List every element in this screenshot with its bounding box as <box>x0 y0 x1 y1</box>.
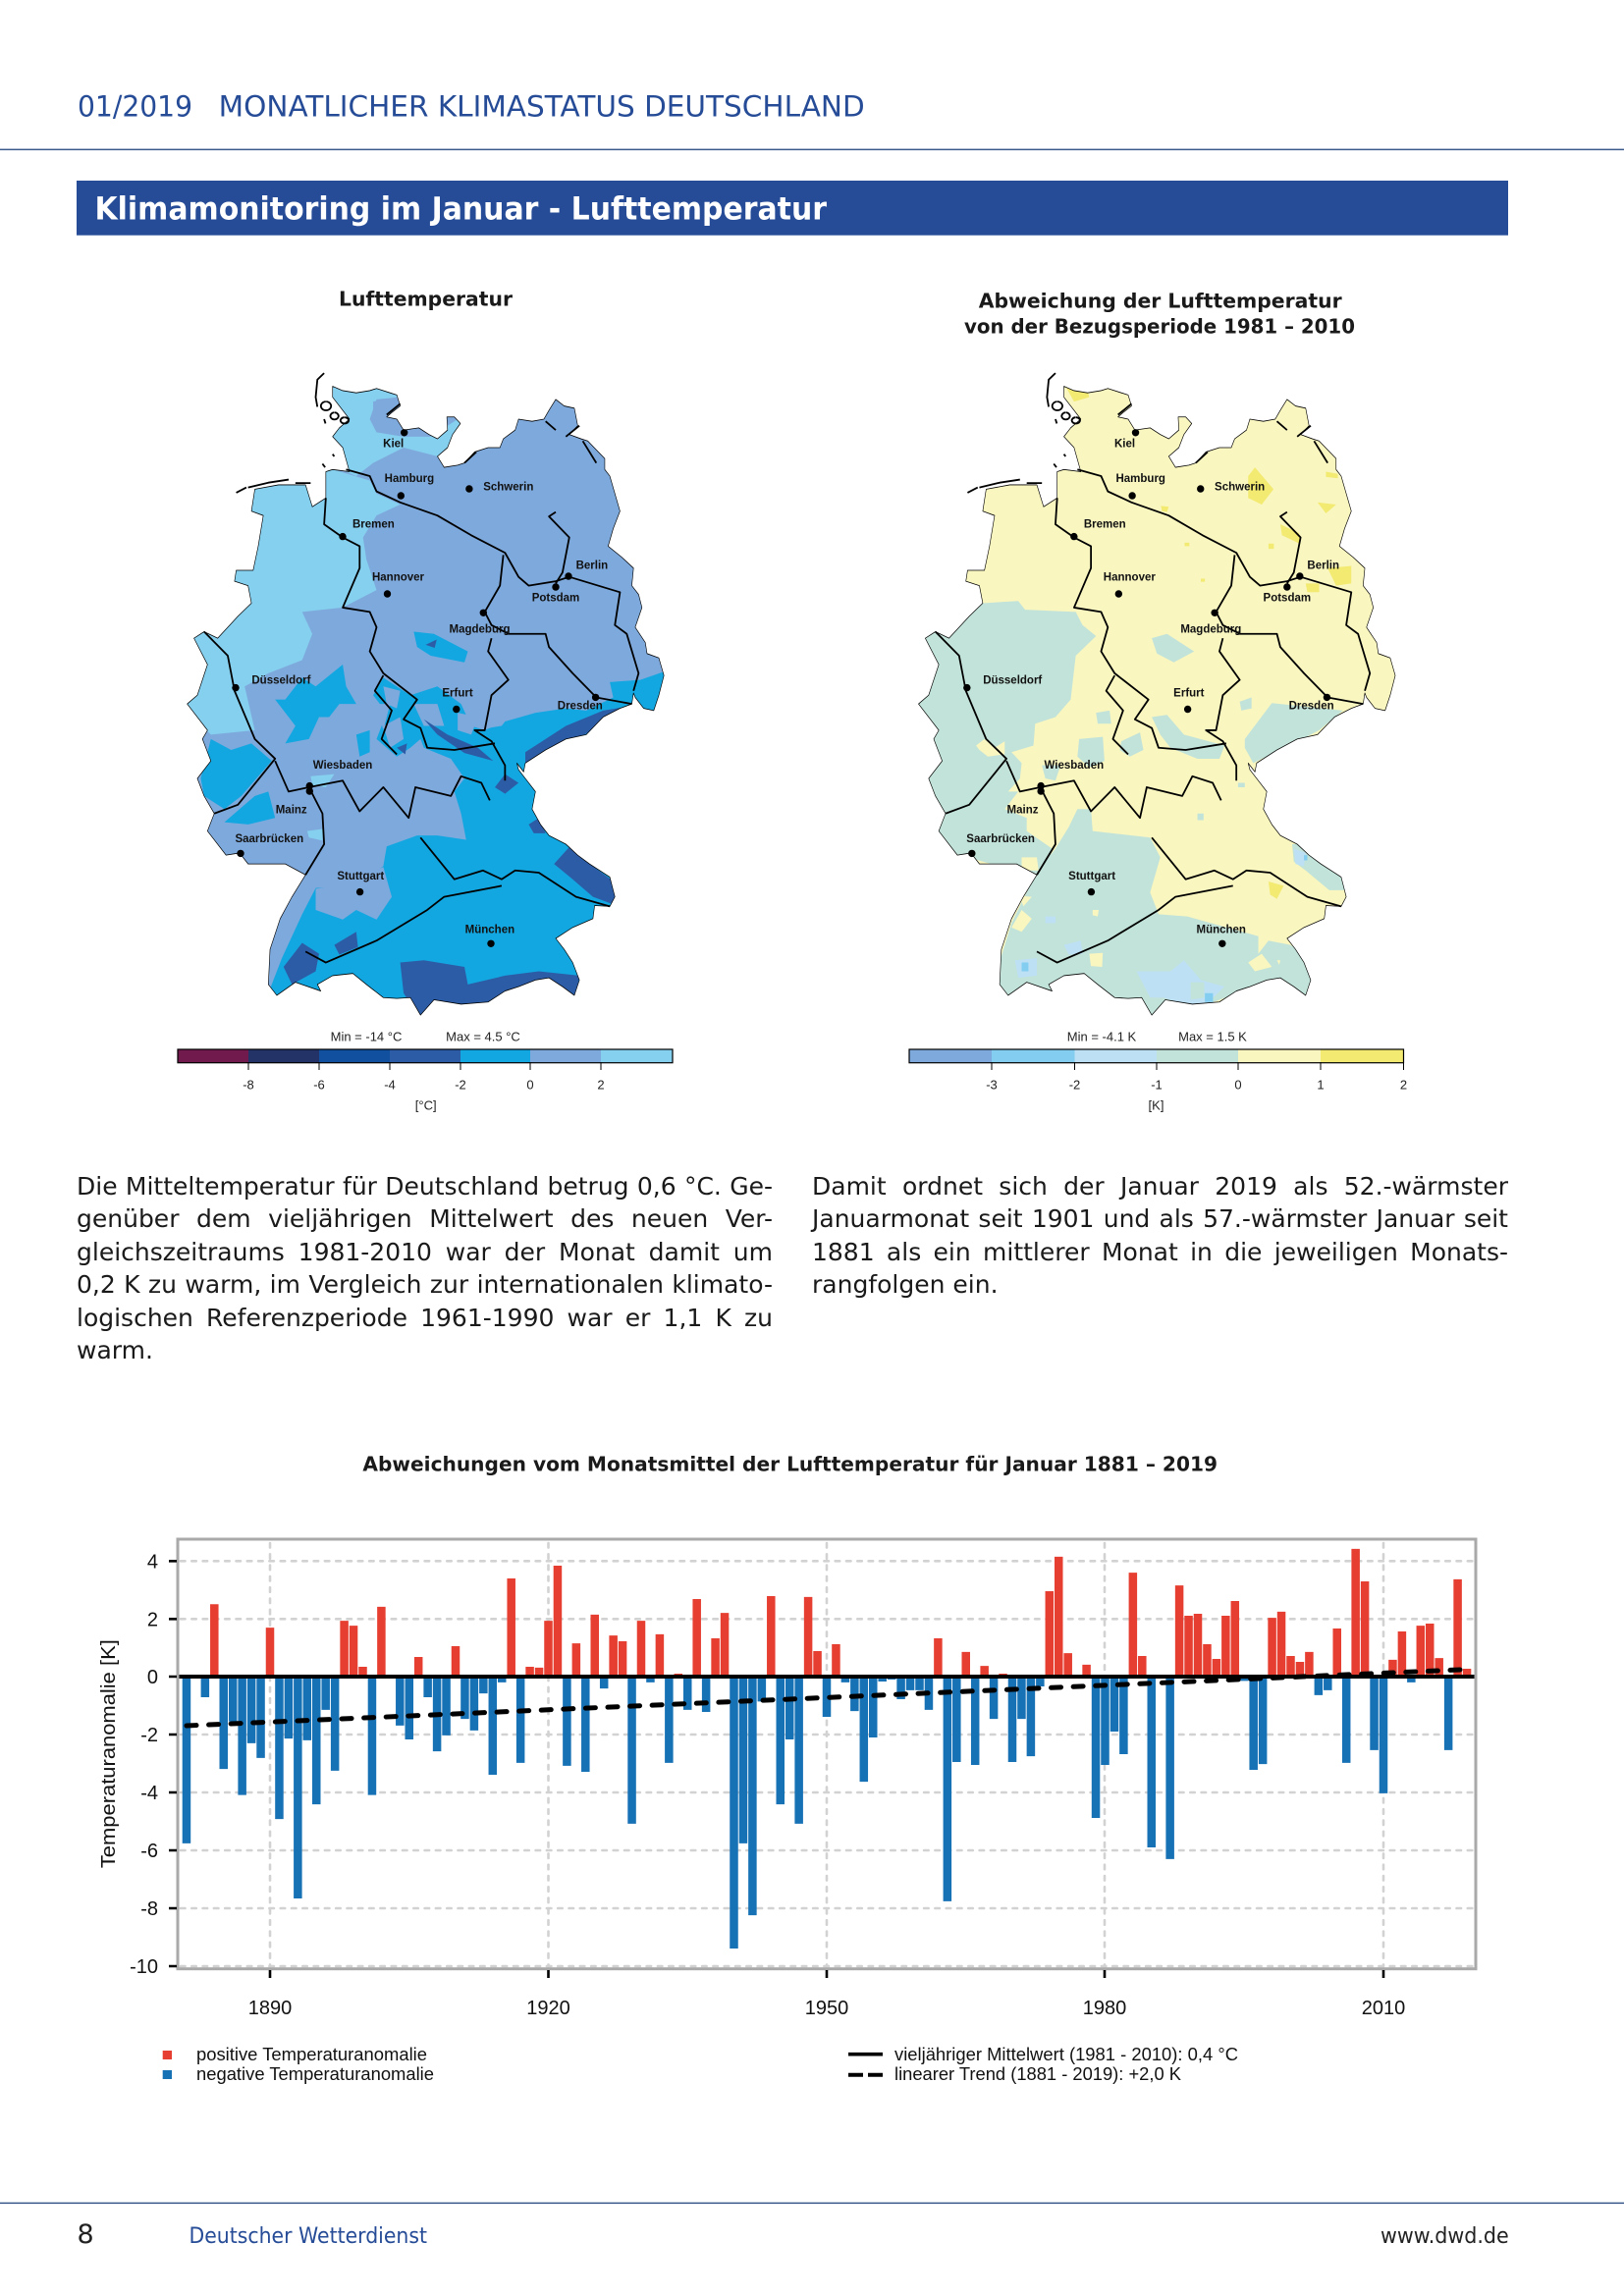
city markers and names: Magdeburg <box>1180 623 1241 635</box>
temperature colour legend: Max = 4.5 °C <box>446 1029 520 1044</box>
bar chart: January temperature anomalies 1881-2019 <box>98 1539 1476 2019</box>
temperature colour legend: 0 <box>526 1078 534 1092</box>
section banner: Klimamonitoring im Januar - Lufttemperatur <box>94 189 827 227</box>
city markers and names: Düsseldorf <box>983 675 1042 687</box>
city markers and names: Kiel <box>383 438 404 450</box>
footer: Deutscher Wetterdienst <box>189 2223 427 2249</box>
text block: left column: 0,2 K zu warm, im Vergleich zur internationalen klimato- <box>77 1270 773 1299</box>
map title: deviation from reference period: von der Bezugsperiode 1981 – 2010 <box>964 314 1355 338</box>
map title: deviation from reference period <box>964 289 1355 338</box>
x axis labels: 1950 <box>805 1998 848 2019</box>
chart title: Abweichungen vom Monatsmittel der Lufttemperatur für Januar 1881 – 2019 <box>362 1452 1218 1475</box>
positive anomaly bars <box>210 1549 1471 1677</box>
y axis labels <box>130 1551 158 1978</box>
zero reference line <box>178 1675 1476 1679</box>
city markers and names: München <box>465 925 514 936</box>
chart legend: lines: linearer Trend (1881 - 2019): +2,0 K <box>894 2063 1182 2084</box>
city markers and names: Mainz <box>1007 805 1039 817</box>
linear trend line <box>187 1670 1466 1726</box>
text block: left column: logischen Referenzperiode 1961-1990 war er 1,1 K zu <box>77 1304 773 1332</box>
city markers and names: Wiesbaden <box>1045 760 1104 772</box>
map title: deviation from reference period: Abweichung der Lufttemperatur <box>979 289 1343 312</box>
city markers and names: Erfurt <box>442 687 473 699</box>
map: temperature anomaly regions of Germany <box>918 373 1396 1015</box>
y axis labels: 0 <box>147 1667 158 1688</box>
chart legend: anomalies: negative Temperaturanomalie <box>196 2063 434 2084</box>
city markers and names: Saarbrücken <box>966 833 1035 845</box>
x axis labels <box>248 1998 1405 2019</box>
panel: air temperature map <box>167 288 697 1113</box>
text block: right column: Damit ordnet sich der Januar 2019 als 52.-wärmster <box>812 1172 1508 1201</box>
temperature colour legend: -4 <box>384 1078 396 1092</box>
city markers and names <box>232 429 608 947</box>
city markers and names <box>963 429 1339 947</box>
temperature colour legend: Min = -14 °C <box>331 1029 402 1044</box>
anomaly colour legend: 1 <box>1317 1078 1325 1092</box>
anomaly colour legend: [K] <box>1149 1097 1164 1113</box>
temperature colour legend: -6 <box>313 1078 325 1092</box>
city markers and names: Dresden <box>1289 701 1334 713</box>
panel: deviation map <box>903 289 1434 1113</box>
city markers and names: Erfurt <box>1173 687 1205 699</box>
temperature colour legend: -2 <box>455 1078 466 1092</box>
chart legend: anomalies: positive Temperaturanomalie <box>196 2044 427 2064</box>
y axis labels: 2 <box>147 1610 158 1631</box>
temperature colour legend <box>178 1029 673 1113</box>
header title: 01/2019 <box>78 89 192 123</box>
x axis labels: 1980 <box>1083 1998 1126 2019</box>
header title: MONATLICHER KLIMASTATUS DEUTSCHLAND <box>219 89 865 123</box>
city markers and names: Schwerin <box>1215 482 1265 494</box>
city markers and names: Hamburg <box>385 473 434 485</box>
city markers and names: Berlin <box>1307 561 1339 572</box>
text block: left column <box>77 1172 773 1364</box>
text block: left column: Die Mitteltemperatur für Deutschland betrug 0,6 °C. Ge- <box>77 1172 773 1201</box>
anomaly colour legend: -1 <box>1151 1078 1163 1092</box>
anomaly colour legend: 2 <box>1400 1078 1407 1092</box>
section banner <box>77 181 1508 236</box>
y axis title: Temperaturanomalie [K] <box>98 1639 120 1868</box>
text block: right column: 1881 als ein mittlerer Monat in die jeweiligen Monats- <box>812 1238 1508 1266</box>
y axis labels: -4 <box>140 1783 158 1804</box>
map title: Lufttemperatur: Lufttemperatur <box>339 288 514 311</box>
city markers and names: Schwerin <box>483 482 533 494</box>
city markers and names: Dresden <box>558 701 603 713</box>
city markers and names: München <box>1196 925 1246 936</box>
temperature colour legend: -8 <box>243 1078 254 1092</box>
map: temperature regions of Germany <box>187 373 664 1015</box>
y axis labels: -8 <box>140 1898 158 1920</box>
anomaly colour legend: -3 <box>986 1078 998 1092</box>
y axis labels: 4 <box>147 1551 158 1573</box>
x axis labels: 1890 <box>248 1998 292 2019</box>
text block: left column: genüber dem vieljährigen Mittelwert des neuen Ver- <box>77 1204 773 1233</box>
axis ticks <box>169 1561 1383 1978</box>
city markers and names: Potsdam <box>1264 593 1311 605</box>
city markers and names: Kiel <box>1114 438 1135 450</box>
anomaly colour legend <box>909 1029 1407 1113</box>
text block: right column: Januarmonat seit 1901 und als 57.-wärmster Januar seit <box>812 1204 1508 1233</box>
y axis labels: -6 <box>140 1841 158 1862</box>
text block: right column <box>811 1172 1508 1299</box>
anomaly colour legend: 0 <box>1234 1078 1242 1092</box>
footer: 8 <box>77 2219 94 2250</box>
city markers and names: Berlin <box>576 561 608 572</box>
city markers and names: Saarbrücken <box>235 833 303 845</box>
plot frame <box>178 1539 1476 1969</box>
text block: left column: gleichszeitraums 1981-2010 war der Monat damit um <box>77 1238 773 1266</box>
text block: right column: rangfolgen ein. <box>812 1270 999 1299</box>
footer: www.dwd.de <box>1380 2223 1509 2249</box>
city markers and names: Hamburg <box>1115 473 1165 485</box>
temperature colour legend: [°C] <box>415 1097 437 1113</box>
city markers and names: Hannover <box>1104 572 1156 584</box>
chart legend: anomalies <box>163 2044 434 2084</box>
city markers and names: Hannover <box>372 572 425 584</box>
y axis labels: -2 <box>140 1725 158 1746</box>
city markers and names: Stuttgart <box>337 871 384 882</box>
text block: left column: warm. <box>77 1336 153 1364</box>
city markers and names: Magdeburg <box>450 623 510 635</box>
anomaly colour legend: Max = 1.5 K <box>1178 1029 1247 1044</box>
city markers and names: Mainz <box>276 805 307 817</box>
negative anomaly bars <box>183 1677 1452 1949</box>
anomaly colour legend: Min = -4.1 K <box>1067 1029 1137 1044</box>
chart legend: lines: vieljähriger Mittelwert (1981 - 2010): 0,4 °C <box>894 2044 1238 2064</box>
city markers and names: Wiesbaden <box>313 760 372 772</box>
city markers and names: Bremen <box>1084 519 1126 531</box>
anomaly colour legend: -2 <box>1069 1078 1080 1092</box>
chart legend: lines <box>848 2044 1238 2084</box>
city markers and names: Düsseldorf <box>251 675 311 687</box>
city markers and names: Bremen <box>352 519 395 531</box>
footer <box>77 2219 1509 2250</box>
x axis labels: 1920 <box>526 1998 570 2019</box>
temperature colour legend: 2 <box>597 1078 605 1092</box>
city markers and names: Stuttgart <box>1068 871 1115 882</box>
x axis labels: 2010 <box>1362 1998 1405 2019</box>
city markers and names: Potsdam <box>532 593 579 605</box>
y axis labels: -10 <box>130 1956 158 1978</box>
